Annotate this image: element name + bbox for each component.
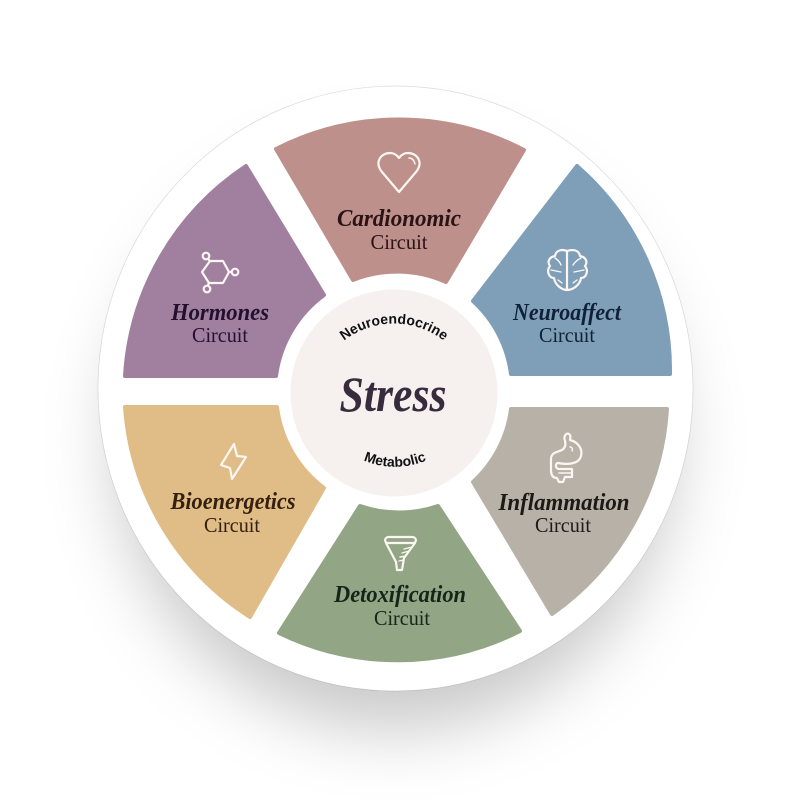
label: Neuroaffect Circuit <box>512 300 622 347</box>
label: Cardionomic Circuit: Cardionomic <box>337 206 461 232</box>
label: Detoxification Circuit: Detoxification <box>333 582 466 608</box>
label: Hormones Circuit: Hormones <box>170 300 269 326</box>
segment: Bioenergetics <box>125 407 324 617</box>
icon: heart <box>378 153 420 192</box>
label: Bioenergetics Circuit: Bioenergetics <box>170 489 296 515</box>
icon: brain <box>548 250 587 290</box>
heading: Stress: Stress <box>340 366 446 422</box>
white wheel disc <box>98 86 693 691</box>
label: Inflammation Circuit: Circuit <box>535 513 591 537</box>
label: Detoxification Circuit <box>333 582 466 630</box>
label: Cardionomic Circuit: Circuit <box>370 230 428 254</box>
segment: Detoxification <box>279 506 520 660</box>
icon: lightning bolt <box>221 444 246 479</box>
icon: funnel <box>385 537 416 570</box>
label: Hormones Circuit <box>170 300 269 347</box>
segment: Cardionomic <box>276 119 524 282</box>
wheel drop shadow <box>115 150 675 730</box>
label: Inflammation Circuit: Inflammation <box>498 490 630 516</box>
label: Metabolic: Metabolic <box>364 452 426 467</box>
label: Neuroaffect Circuit: Circuit <box>539 323 595 347</box>
icon: stomach <box>551 434 581 482</box>
icon: molecule <box>202 253 238 292</box>
label: Detoxification Circuit: Circuit <box>374 606 430 630</box>
label: Neuroendocrine: Neuroendocrine <box>339 314 447 340</box>
label: Neuroaffect Circuit: Neuroaffect <box>512 300 622 326</box>
label: Bioenergetics Circuit <box>170 489 296 537</box>
label: Inflammation Circuit <box>498 490 630 537</box>
label: Cardionomic Circuit <box>337 206 461 254</box>
segment: Neuroaffect <box>473 166 670 374</box>
center hub <box>290 290 498 496</box>
segment: Hormones <box>125 166 324 376</box>
segment: Inflammation <box>473 409 667 614</box>
label: Bioenergetics Circuit: Circuit <box>204 513 260 537</box>
label: Hormones Circuit: Circuit <box>192 323 248 347</box>
